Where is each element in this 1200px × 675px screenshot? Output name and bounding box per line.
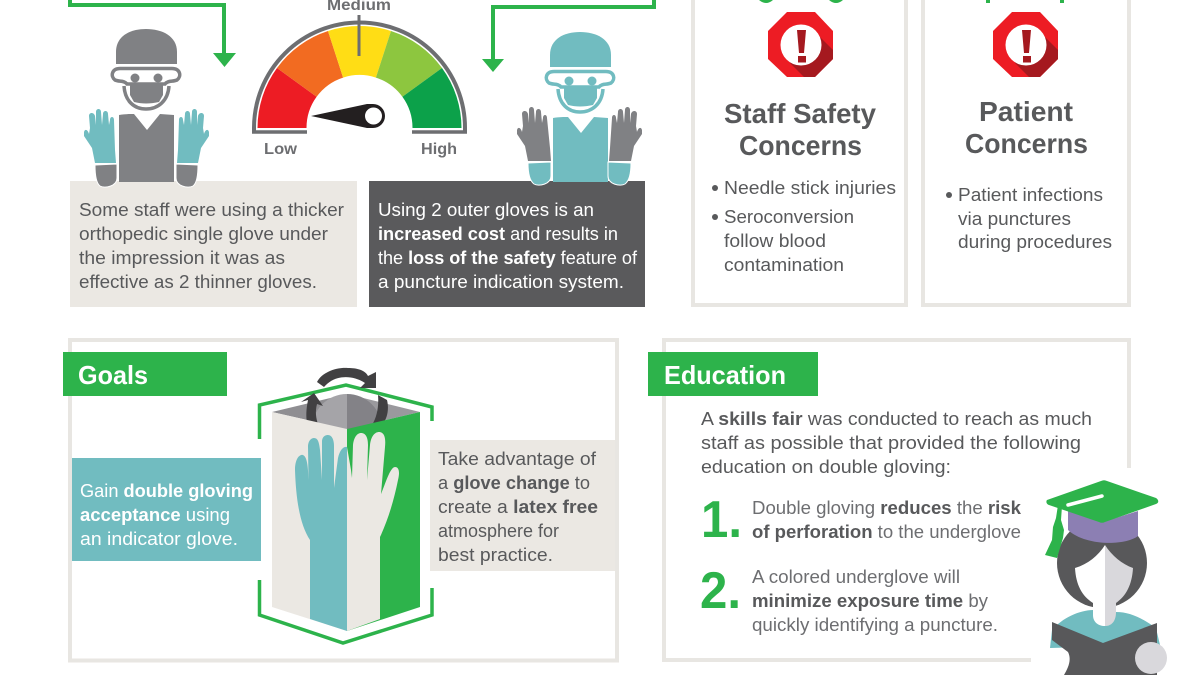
panel: patient concerns [923,0,1129,305]
bullet list: staff concerns: follow blood [724,231,826,251]
text block: thicker glove note: effective as 2 thinner gloves. [79,272,317,292]
heading: patient concerns: Concerns [965,128,1088,159]
bullet list: staff concerns: Seroconversion [724,207,854,227]
chart: risk gauge [252,0,467,158]
text block: latex free goal [430,440,615,571]
list item 2: minimize exposure time by [752,591,988,611]
list item 2: A colored underglove will [752,567,960,587]
text block: two outer gloves note: Using 2 outer gloves is an [378,200,594,220]
heading: patient concerns: Patient [979,96,1073,127]
text block: two outer gloves note: increased cost and results in [378,224,618,244]
icon: graduate with cap and book [1031,468,1200,675]
bullet list: patient concerns [946,185,1112,252]
heading: education: Education [664,360,786,390]
heading: staff safety concerns: Concerns [739,130,862,161]
text block: thicker glove note: orthopedic single glove under [79,224,328,244]
arrow: right connector [482,0,654,72]
text block: two outer gloves note: the loss of the safety feature of [378,248,638,268]
text block: two outer gloves note: a puncture indication system. [378,272,624,292]
gauge label: low: Low [264,141,298,158]
icon: warning octagon [768,12,833,77]
text block: indicator glove goal: an indicator glove. [80,529,238,549]
bullet list: staff concerns [712,178,896,275]
text block: latex free goal: atmosphere for [438,521,559,541]
heading: patient concerns [965,96,1088,159]
bullet list: staff concerns: Needle stick injuries [724,178,896,198]
list item 2: quickly identifying a puncture. [752,615,998,635]
bullet list: patient concerns: via punctures [958,209,1071,229]
text block: skills fair intro: A skills fair was conducted to reach as much [701,409,1092,429]
heading: staff safety concerns: Staff Safety [724,98,876,129]
text block: skills fair intro: staff as possible that provided the following [701,433,1081,453]
text block: skills fair intro [701,409,1092,477]
list item 1: Double gloving reduces the risk [752,498,1022,518]
bullet list: staff concerns: contamination [724,255,844,275]
list item 1: of perforation to the underglove [752,522,1021,542]
heading: goals: Goals [78,360,148,390]
heading: education [648,352,818,396]
text block: two outer gloves note [369,181,645,307]
panel: staff safety concerns [693,0,906,305]
list item 2 [700,562,998,635]
text block: thicker glove note: Some staff were using a thicker [79,200,344,220]
icon: staff with teal gown and grey gloves [517,32,642,185]
gauge needle [311,104,385,128]
list item 2: 2. [700,562,741,620]
text block: skills fair intro: education on double gloving: [701,457,951,477]
text block: latex free goal: best practice. [438,545,553,565]
panel: education [648,340,1129,660]
panel: goals [63,340,617,660]
text block: latex free goal: a glove change to [438,473,590,493]
list item 1: 1. [701,491,742,549]
text block: latex free goal: Take advantage of [438,449,597,469]
icon: warning octagon [993,12,1058,77]
heading: staff safety concerns [724,98,876,161]
text block: thicker glove note: the impression it was as [79,248,285,268]
text block: latex free goal: create a latex free [438,497,598,517]
text block: thicker glove note [70,181,357,307]
text block: indicator glove goal: Gain double gloving [80,481,253,501]
bullet list: patient concerns: Patient infections [958,185,1103,205]
gauge label: high: High [421,141,457,158]
text block: indicator glove goal [72,458,261,561]
list item 1 [701,491,1022,549]
icon: staff with grey gown and teal gloves [84,29,209,187]
heading: goals [63,352,227,396]
icon: glove box with swap arrows [260,368,432,643]
bullet list: patient concerns: during procedures [958,232,1112,252]
arrow: left connector [70,0,236,67]
text block: indicator glove goal: acceptance using [80,505,230,525]
